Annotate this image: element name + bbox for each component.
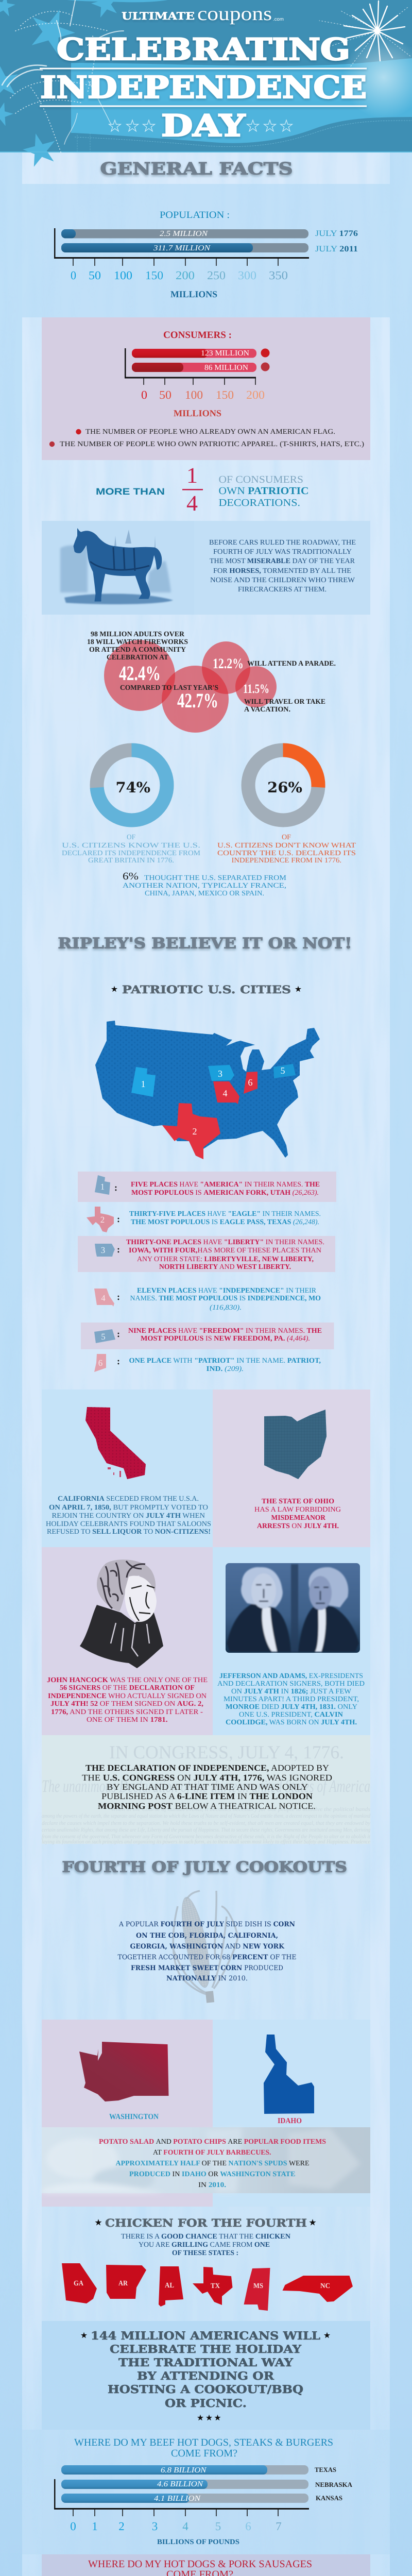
header banner <box>0 0 412 168</box>
logo: ULTIMATE <box>122 10 195 22</box>
icon: georgia <box>62 2263 97 2303</box>
donut chart: 26 percent <box>248 750 318 820</box>
bar chart: beef: 6.8 BILLION <box>161 2466 207 2475</box>
list row 2: eagle: 2 <box>100 1215 105 1225</box>
caption: 74 percent: U.S. CITIZENS KNOW THE U.S. <box>62 842 200 850</box>
hancock text: 56 SIGNERS OF THE DECLARATION OF <box>60 1684 195 1692</box>
portrait: adams and jefferson <box>226 1563 360 1653</box>
ohio text: THE STATE OF OHIO <box>262 1498 334 1505</box>
list row 1: america: : <box>114 1182 117 1193</box>
chart: overlapping percentage circles: WILL TRAVEL OR TAKE <box>244 698 325 706</box>
text: six percent: THOUGHT THE U.S. SEPARATED FROM <box>144 874 287 882</box>
section: beef <box>54 2437 353 2546</box>
bar chart: consumers: 123 MILLION <box>201 349 249 358</box>
faded declaration document: from the consent of the governed, That whenever any Form of Government becomes destructive of these ends, it is the Right of the People to alter or to abolish it <box>42 1834 371 1840</box>
horses text: FOURTH OF JULY WAS TRADITIONALLY <box>213 548 352 556</box>
map: united states: 2 <box>193 1126 197 1137</box>
text: corn: FRESH MARKET SWEET CORN PRODUCED <box>131 1964 283 1972</box>
callout: more than one quarter: OWN PATRIOTIC <box>218 485 309 497</box>
horses text: NOISE AND THE CHILDREN WHO THREW <box>210 577 355 584</box>
icon: washington state <box>79 2042 169 2102</box>
list row 5: freedom: : <box>117 1329 120 1339</box>
bar chart: consumers: 150 <box>216 388 234 401</box>
caption: 74 percent: OF <box>127 834 135 841</box>
icon: arkansas: AR <box>118 2280 128 2287</box>
list row 2: eagle: THIRTY-FIVE PLACES HAVE "EAGLE" IN THEIR NAMES. <box>129 1210 321 1218</box>
horses text: BEFORE CARS RULED THE ROADWAY, THE <box>209 539 356 547</box>
california text <box>46 1495 211 1536</box>
caption: 26 percent <box>217 834 356 865</box>
list row 2: eagle: : <box>117 1214 120 1224</box>
label: idaho: IDAHO <box>278 2117 302 2125</box>
icon: texas <box>193 2267 233 2305</box>
icon: california <box>85 1407 146 1479</box>
list row 1: america: MOST POPULOUS IS AMERICAN FORK, UTAH (26,263). <box>131 1189 319 1197</box>
title <box>40 32 367 143</box>
list row 1: america <box>78 1172 336 1202</box>
list row 6: patriot: : <box>117 1356 120 1366</box>
bar chart: population: 0 <box>71 269 76 282</box>
california text: CALIFORNIA SECEDED FROM THE U.S.A. <box>58 1495 199 1503</box>
map: united states <box>95 1021 320 1159</box>
list row 4: independence: (116,830). <box>210 1304 242 1312</box>
list row 3: liberty <box>78 1236 335 1272</box>
horses text <box>209 539 356 594</box>
bar chart: beef: 2 <box>118 2520 125 2533</box>
list row 3: liberty: NORTH LIBERTY AND WEST LIBERTY. <box>159 1263 291 1271</box>
jefferson text: MONROE DIED JULY 4TH, 1831. ONLY <box>226 1703 357 1711</box>
california text: REFUSED TO SELL LIQUOR TO NON-CITIZENS! <box>47 1528 211 1536</box>
bar chart: beef: 7 <box>276 2520 282 2533</box>
hancock text: JOHN HANCOCK WAS THE ONLY ONE OF THE <box>47 1676 208 1684</box>
caption: 74 percent: GREAT BRITAIN IN 1776. <box>88 857 174 865</box>
list row 5: freedom: NINE PLACES HAVE "FREEDOM" IN THEIR NAMES. THE <box>128 1327 322 1335</box>
text: corn: TOGETHER ACCOUNTED FOR 68 PERCENT OF THE <box>117 1954 297 1961</box>
list row 2: eagle <box>87 1207 321 1232</box>
horses text: FOR HORSES, TORMENTED BY ALL THE <box>213 567 351 575</box>
panel: declaration <box>42 1735 371 1845</box>
hot dogs heading: WHERE DO MY HOT DOGS & PORK SAUSAGES <box>88 2558 312 2570</box>
horses text: THE MOST MISERABLE DAY OF THE YEAR <box>210 557 355 565</box>
bar chart: population: 2.5 MILLION <box>160 230 208 238</box>
callout: more than one quarter: 4 <box>186 492 198 516</box>
panel: consumers <box>42 317 370 460</box>
section: chicken for the fourth <box>62 2216 353 2311</box>
map: united states: 4 <box>222 1088 228 1098</box>
bar chart: beef: 4.6 BILLION <box>157 2480 203 2488</box>
heading: ripley's: RIPLEY'S BELIEVE IT OR NOT! <box>58 935 352 952</box>
caption: 26 percent: INDEPENDENCE FROM IN 1776. <box>232 857 341 865</box>
map: united states: 5 <box>280 1065 285 1076</box>
chart: overlapping percentage circles: 98 MILLION ADULTS OVER <box>91 631 185 638</box>
list row 1: america: FIVE PLACES HAVE "AMERICA" IN THEIR NAMES. THE <box>131 1181 320 1189</box>
chart: overlapping percentage circles <box>87 631 336 733</box>
bar chart: consumers: 50 <box>159 388 171 401</box>
chicken text: YOU ARE GRILLING CAME FROM ONE <box>139 2241 270 2249</box>
panel: john hancock <box>42 1547 213 1735</box>
bar chart: population: JULY 1776 <box>315 229 358 238</box>
bar chart: population: 300 <box>238 269 256 282</box>
declaration text <box>82 1763 332 1811</box>
bar chart: consumers <box>125 348 270 418</box>
list row 3: liberty: IOWA, WITH FOUR,HAS MORE OF THESE PLACES THAN <box>129 1247 321 1255</box>
list row 3: liberty: : <box>117 1244 120 1255</box>
text: corn: GEORGIA, WASHINGTON AND NEW YORK <box>130 1943 285 1951</box>
legend: consumers: THE NUMBER OF PEOPLE WHO OWN PATRIOTIC APPAREL. (T-SHIRTS, HATS, ETC.) <box>60 440 364 448</box>
map: united states: 6 <box>248 1077 252 1088</box>
bar chart: beef: NEBRASKA <box>315 2481 353 2488</box>
hot dogs heading <box>88 2558 312 2576</box>
ohio text: MISDEMEANOR <box>271 1514 326 1522</box>
list row 3: liberty: THIRTY-ONE PLACES HAVE "LIBERTY" IN THEIR NAMES. <box>126 1239 324 1246</box>
bar chart: population: MILLIONS <box>170 289 217 299</box>
callout: more than one quarter <box>96 464 309 516</box>
144 million text: BY ATTENDING OR <box>137 2370 274 2383</box>
list row 1: america: 1 <box>100 1182 105 1192</box>
donut chart: 74 percent: 74% <box>115 779 150 796</box>
logo: .com <box>273 16 284 22</box>
bar chart: beef: TEXAS <box>315 2466 336 2473</box>
icon: texas: TX <box>211 2282 220 2290</box>
california text: REJOIN THE COUNTRY ON JULY 4TH WHEN <box>52 1512 205 1520</box>
bar chart: beef: KANSAS <box>316 2494 342 2502</box>
title: DAY <box>161 108 246 143</box>
ohio text: HAS A LAW FORBIDDING <box>254 1506 341 1514</box>
faded declaration document: laying its foundation on such principles and organizing its powers in such form, as to them shall seem most likely to effect their Safety and Happiness. Prudence <box>42 1839 370 1845</box>
donut chart: 74 percent <box>97 750 167 820</box>
panel: idaho <box>213 2020 370 2207</box>
list row 4: independence: : <box>117 1292 120 1302</box>
potato text: APPROXIMATELY HALF OF THE NATION'S SPUDS WERE <box>115 2160 309 2167</box>
bar chart: population: 200 <box>176 269 195 282</box>
map: united states: 3 <box>218 1069 222 1079</box>
list row 6: patriot <box>94 1354 321 1373</box>
bar chart: population: 311.7 MILLION <box>153 244 211 252</box>
map: united states: 1 <box>141 1079 145 1089</box>
list row 4: independence: 4 <box>101 1293 106 1303</box>
faded declaration document <box>42 1742 371 1845</box>
bar chart: population: 250 <box>207 269 226 282</box>
bar chart: beef <box>54 2465 353 2546</box>
panel: population <box>54 210 358 299</box>
callout: more than one quarter: OF CONSUMERS <box>218 474 303 485</box>
chicken text <box>121 2233 290 2257</box>
icon: mississippi: MS <box>253 2282 263 2290</box>
california text: HOLIDAY CELEBRANTS FOUND THAT SALOONS <box>46 1520 211 1528</box>
icon: arkansas <box>106 2265 146 2299</box>
jefferson text: ONE U.S. PRESIDENT, CALVIN <box>239 1711 343 1719</box>
declaration text: PUBLISHED AS A 6-LINE ITEM IN THE LONDON <box>101 1791 313 1801</box>
declaration text: BY ENGLAND AT THAT TIME AND WAS ONLY <box>107 1782 308 1792</box>
bar chart: consumers: 86 MILLION <box>204 364 248 372</box>
jefferson text: MINUTES APART! A THIRD PRESIDENT, <box>224 1696 359 1703</box>
icon: fireworks left <box>2 0 124 155</box>
declaration text: THE U.S. CONGRESS ON JULY 4TH, 1776, WAS IGNORED <box>82 1773 332 1783</box>
bar chart: population <box>54 228 358 299</box>
label: washington: WASHINGTON <box>109 2113 159 2121</box>
icon: horse engraving <box>60 529 173 604</box>
144 million text: CELEBRATE THE HOLIDAY <box>110 2343 302 2356</box>
icon: fireworks right <box>319 1 411 67</box>
subheading: patriotic cities: PATRIOTIC U.S. CITIES <box>122 983 291 996</box>
jefferson text: COOLIDGE, WAS BORN ON JULY 4TH. <box>226 1719 357 1726</box>
bar chart: consumers: 0 <box>141 388 147 401</box>
legend: consumers <box>49 428 364 448</box>
potato text <box>99 2138 326 2189</box>
list row 5: freedom: 5 <box>101 1332 106 1342</box>
jefferson text: AND DECLARATION SIGNERS, BOTH DIED <box>217 1680 365 1688</box>
list row 2: eagle: THE MOST POPULOUS IS EAGLE PASS, TEXAS (26,248). <box>131 1218 319 1226</box>
bar chart: beef: 3 <box>152 2520 158 2533</box>
population heading: POPULATION : <box>160 210 230 221</box>
chart: overlapping percentage circles: CELEBRATION AT <box>107 654 169 662</box>
144 million text: HOSTING A COOKOUT/BBQ <box>108 2383 303 2396</box>
bar chart: consumers: MILLIONS <box>174 408 221 418</box>
list row 6: patriot: 6 <box>98 1358 102 1368</box>
icon: north carolina <box>282 2276 353 2302</box>
declaration text: THE DECLARATION OF INDEPENDENCE, ADOPTED BY <box>85 1763 329 1773</box>
panel: washington <box>42 2020 213 2207</box>
144 million text: OR PICNIC. <box>165 2397 247 2410</box>
donut chart: 26 percent: 26% <box>267 779 302 796</box>
chart: overlapping percentage circles: COMPARED TO LAST YEAR'S <box>120 684 218 692</box>
callout: more than one quarter: MORE THAN <box>96 486 165 497</box>
heading: cookouts: FOURTH OF JULY COOKOUTS <box>62 1858 347 1875</box>
potato text: IN 2010. <box>198 2181 226 2189</box>
title: CELEBRATING <box>57 32 350 67</box>
bar chart: beef: 6 <box>245 2520 251 2533</box>
hancock text: ONE OF THEM IN 1781. <box>87 1716 168 1724</box>
california text: ON APRIL 7, 1850, BUT PROMPTLY VOTED TO <box>49 1504 208 1512</box>
caption: 74 percent <box>62 834 201 865</box>
chart: overlapping percentage circles: 42.4% <box>119 662 161 685</box>
bar chart: consumers: 200 <box>246 388 265 401</box>
bar chart: population: 100 <box>114 269 132 282</box>
title: INDEPENDENCE <box>40 70 367 105</box>
icon: mississippi <box>244 2268 270 2311</box>
144 million text: 144 MILLION AMERICANS WILL <box>91 2330 320 2343</box>
declaration text: MORNING POST BELOW A THEATRICAL NOTICE. <box>98 1801 316 1811</box>
callout: more than one quarter: DECORATIONS. <box>218 497 300 509</box>
consumers heading: CONSUMERS : <box>163 330 232 341</box>
jefferson text: ON JULY 4TH IN 1826; JUST A FEW <box>231 1688 352 1696</box>
potato text: PRODUCED IN IDAHO OR WASHINGTON STATE <box>129 2171 296 2178</box>
icon: idaho state <box>264 2035 314 2114</box>
list row 4: independence: NAMES. THE MOST POPULOUS IS INDEPENDENCE, MO <box>130 1295 321 1302</box>
panel: california <box>42 1389 213 1547</box>
caption: 26 percent: OF <box>282 834 291 841</box>
panel: hot dogs and pork <box>42 2554 370 2576</box>
faded declaration document: IN CONGRESS, JULY 4, 1776. <box>109 1742 344 1762</box>
potato text: AT FOURTH OF JULY BARBECUES. <box>153 2149 271 2157</box>
hancock text: 1776, AND THE OTHERS SIGNED IT LATER - <box>51 1708 203 1716</box>
icon: north carolina: NC <box>320 2282 330 2290</box>
beef heading: COME FROM? <box>171 2448 237 2459</box>
hancock text: INDEPENDENCE WHO ACTUALLY SIGNED ON <box>48 1692 207 1700</box>
list row 4: independence <box>94 1287 321 1312</box>
list row 6: patriot: IND. (209). <box>206 1365 244 1373</box>
faded declaration document: When in the Course of human events, it becomes necessary for one people to dissolve the political bands <box>111 1806 370 1812</box>
chart: overlapping percentage circles: 12.2% <box>213 656 244 672</box>
chart: overlapping percentage circles: OR ATTEND A COMMUNITY <box>89 646 186 654</box>
list: patriotic cities <box>78 1172 336 1373</box>
callout: more than one quarter: 1 <box>186 464 198 488</box>
logo <box>122 3 284 25</box>
icon: corn <box>173 1891 238 2003</box>
bar chart: beef: 4 <box>182 2520 188 2533</box>
hancock text: JULY 4TH! 52 OF THEM SIGNED ON AUG. 2, <box>50 1700 203 1708</box>
text: six percent <box>123 871 287 897</box>
text: corn: ON THE COB, FLORIDA, CALIFORNIA, <box>136 1932 278 1940</box>
chart: overlapping percentage circles: 42.7% <box>177 689 218 712</box>
bar chart: beef: BILLIONS OF POUNDS <box>157 2538 239 2546</box>
bar chart: population: 150 <box>145 269 163 282</box>
list row 5: freedom <box>81 1323 334 1349</box>
caption: 26 percent: U.S. CITIZENS DON'T KNOW WHAT <box>217 842 356 850</box>
panel: horses <box>42 521 370 615</box>
bar chart: beef: 0 <box>70 2520 76 2533</box>
icon: georgia: GA <box>74 2280 84 2287</box>
list row 6: patriot: ONE PLACE WITH "PATRIOT" IN THE NAME. PATRIOT, <box>129 1357 321 1365</box>
chicken text: OF THESE STATES : <box>172 2249 238 2257</box>
jefferson text <box>217 1672 365 1726</box>
text: six percent: CHINA, JAPAN, MEXICO OR SPAIN. <box>145 890 264 897</box>
panel: potato salad and chips <box>42 2127 370 2193</box>
icon: alabama: AL <box>165 2282 174 2290</box>
panel: 144 million americans <box>42 2321 370 2430</box>
legend: consumers: THE NUMBER OF PEOPLE WHO ALREADY OWN AN AMERICAN FLAG. <box>85 428 335 436</box>
icon: alabama <box>159 2266 183 2307</box>
potato text: POTATO SALAD AND POTATO CHIPS ARE POPULAR FOOD ITEMS <box>99 2138 326 2146</box>
text: six percent: 6% <box>123 871 139 882</box>
bar chart: consumers: 100 <box>185 388 203 401</box>
heading: general facts: GENERAL FACTS <box>100 159 293 178</box>
ohio text <box>254 1498 341 1530</box>
144 million text: THE TRADITIONAL WAY <box>118 2357 294 2369</box>
chart: overlapping percentage circles: 11.5% <box>243 682 269 696</box>
horses text: FIRECRACKERS AT THEM. <box>238 586 327 594</box>
ohio text: ARRESTS ON JULY 4TH. <box>257 1522 339 1530</box>
faded declaration document: declare the causes which impel them to the separation. We hold these truths to be self-evident, that all men are created equal, that they are endowed by <box>42 1820 370 1826</box>
144 million text <box>91 2330 320 2410</box>
text: corn: NATIONALLY IN 2010. <box>166 1975 248 1982</box>
bar chart: beef: 4.1 BILLION <box>154 2495 201 2503</box>
chart: overlapping percentage circles: A VACATION. <box>244 706 290 714</box>
subheading: chicken: CHICKEN FOR THE FOURTH <box>105 2216 307 2229</box>
chart: overlapping percentage circles: WILL ATTEND A PARADE. <box>247 660 336 668</box>
logo: coupons <box>197 3 272 25</box>
icon: ohio <box>264 1410 327 1479</box>
panel: ohio <box>213 1389 370 1547</box>
list row 3: liberty: ANY OTHER STATE: LIBERTYVILLE, NEW LIBERTY, <box>137 1256 314 1263</box>
jefferson text: JEFFERSON AND ADAMS, EX-PRESIDENTS <box>219 1672 363 1680</box>
bar chart: population: JULY 2011 <box>315 245 358 253</box>
bar chart: population: 50 <box>89 269 101 282</box>
panel: jefferson and adams <box>213 1547 370 1735</box>
beef heading: WHERE DO MY BEEF HOT DOGS, STEAKS & BURGERS <box>74 2437 333 2448</box>
caption: 74 percent: DECLARED ITS INDEPENDENCE FROM <box>62 850 201 857</box>
icon: hancock engraving <box>80 1560 163 1668</box>
bar chart: beef: 5 <box>215 2520 221 2533</box>
icon: outline stars <box>109 120 292 131</box>
list row 3: liberty: 3 <box>101 1245 105 1255</box>
list row 4: independence: ELEVEN PLACES HAVE "INDEPENDENCE" IN THEIR <box>137 1287 317 1295</box>
bar chart: population: 350 <box>269 269 288 282</box>
chart: overlapping percentage circles: 18 WILL WATCH FIREWORKS <box>87 638 188 646</box>
chicken text: THERE IS A GOOD CHANCE THAT THE CHICKEN <box>121 2233 290 2241</box>
caption: 26 percent: COUNTRY THE U.S. DECLARED ITS <box>217 850 356 857</box>
text: six percent: ANOTHER NATION, TYPICALLY FRANCE, <box>123 882 286 890</box>
text: corn: A POPULAR FOURTH OF JULY SIDE DISH IS CORN <box>118 1921 295 1928</box>
list row 5: freedom: MOST POPULOUS IS NEW FREEDOM, PA. (4,464). <box>141 1335 310 1343</box>
bar chart: beef: 1 <box>92 2520 98 2533</box>
hancock text <box>47 1676 208 1724</box>
beef heading <box>74 2437 333 2459</box>
text: corn <box>117 1921 297 1982</box>
